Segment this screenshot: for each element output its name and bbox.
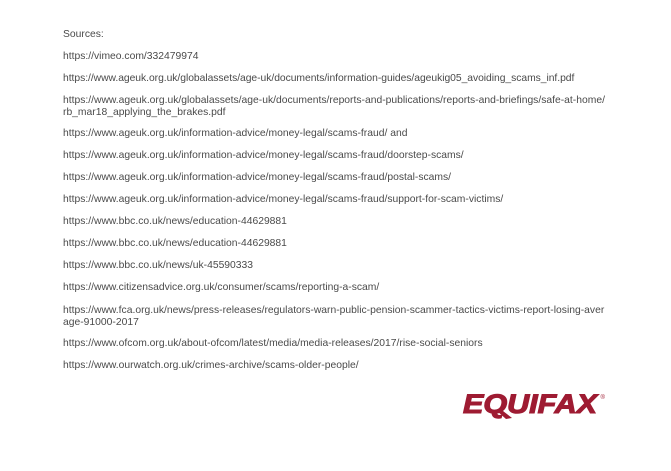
source link: bbc education repeated: https://www.bbc.co.uk/news/education-44629881 [63, 238, 287, 249]
source link: age uk applying the brakes report [63, 95, 605, 118]
source link: age uk avoiding scams guide: https://www.ageuk.org.uk/globalassets/age-uk/documents/information-guides/ageukig05_avoiding_scams_inf.pdf [63, 73, 574, 84]
source link: age uk postal scams: https://www.ageuk.org.uk/information-advice/money-legal/scams-fraud/postal-scams/ [63, 172, 451, 183]
source link: fca press release [63, 305, 604, 328]
heading: sources: Sources: [63, 29, 104, 40]
source link: bbc uk news: https://www.bbc.co.uk/news/uk-45590333 [63, 260, 253, 271]
source link: age uk support for scam victims: https://www.ageuk.org.uk/information-advice/money-legal/scams-fraud/support-for-scam-victims/ [63, 194, 503, 205]
source link: ofcom: https://www.ofcom.org.uk/about-ofcom/latest/media/media-releases/2017/rise-social-seniors [63, 338, 483, 349]
logo: equifax: ® [600, 394, 606, 401]
source link: age uk applying the brakes report: https://www.ageuk.org.uk/globalassets/age-uk/documents/reports-and-publications/reports-and-briefings/safe-at-home/ [63, 95, 605, 106]
source link: our watch: https://www.ourwatch.org.uk/crimes-archive/scams-older-people/ [63, 360, 359, 371]
source link: bbc education: https://www.bbc.co.uk/news/education-44629881 [63, 216, 287, 227]
source link: fca press release: age-91000-2017 [63, 316, 139, 328]
source link: age uk applying the brakes report: rb_mar18_applying_the_brakes.pdf [63, 106, 226, 118]
logo: equifax: EQUIFAX [463, 389, 599, 419]
source link: age uk scams and fraud: https://www.ageuk.org.uk/information-advice/money-legal/scams-fraud/ and [63, 128, 407, 139]
source link: age uk doorstep scams: https://www.ageuk.org.uk/information-advice/money-legal/scams-fraud/doorstep-scams/ [63, 150, 464, 161]
source link: citizens advice: https://www.citizensadvice.org.uk/consumer/scams/reporting-a-scam/ [63, 282, 379, 293]
source link: fca press release: https://www.fca.org.uk/news/press-releases/regulators-warn-public-pension-scammer-tactics-victims-report-losing-aver [63, 305, 604, 316]
source link: vimeo: https://vimeo.com/332479974 [63, 51, 198, 62]
